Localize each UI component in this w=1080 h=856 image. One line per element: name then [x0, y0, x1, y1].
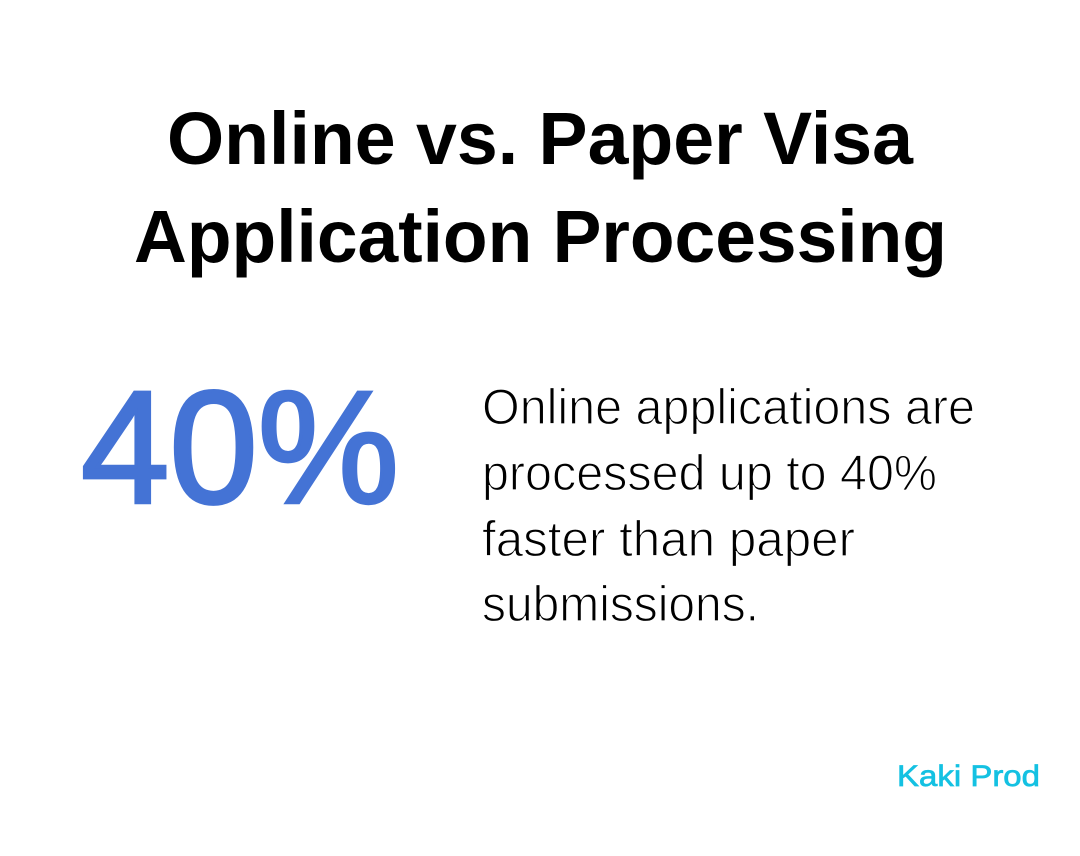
stat description: processed up to 40%: [482, 445, 937, 501]
title: Online vs. Paper Visa: [167, 97, 914, 180]
stat description: submissions.: [482, 576, 759, 632]
stat description: [482, 379, 975, 632]
logo: Kaki Prod: Kaki Prod: [897, 760, 1040, 793]
big stat: 40%: 40%: [81, 358, 399, 536]
title: Application Processing: [134, 195, 947, 278]
stat description: faster than paper: [482, 511, 855, 567]
stat description: Online applications are: [482, 379, 975, 435]
title: [134, 97, 947, 278]
